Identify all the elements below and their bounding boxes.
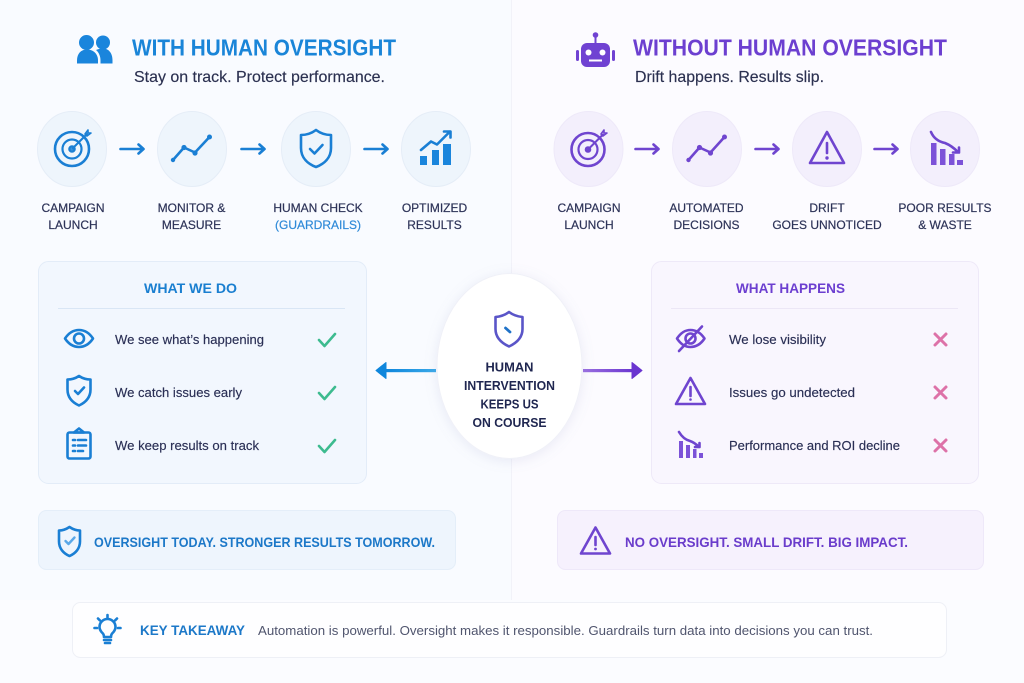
step: human check: HUMAN CHECK — [273, 201, 363, 215]
icon: robot — [576, 32, 615, 67]
panel: what happens — [652, 262, 978, 484]
heading: without human oversight: WITHOUT HUMAN OVERSIGHT — [633, 34, 947, 60]
banner text: OVERSIGHT TODAY. STRONGER RESULTS TOMORROW. — [94, 534, 435, 550]
row: performance decline: Performance and ROI decline — [729, 438, 900, 453]
takeaway text: Automation is powerful. Oversight makes it responsible. Guardrails turn data into decisions you can trust. — [258, 624, 873, 638]
row: lose visibility: We lose visibility — [729, 332, 827, 347]
row: keep results on track — [68, 428, 335, 458]
icon: shield — [496, 312, 522, 346]
row: catch issues early — [68, 376, 335, 406]
step: automated decisions: AUTOMATED — [669, 201, 744, 215]
step: optimized results: RESULTS — [407, 218, 462, 232]
row: performance decline — [679, 432, 946, 458]
arrow — [636, 144, 658, 154]
step: optimized results — [402, 112, 470, 232]
panel: key takeaway — [72, 602, 946, 658]
row: see what's happening — [65, 330, 335, 347]
arrow — [364, 144, 388, 154]
step: campaign launch: LAUNCH — [564, 218, 614, 232]
icon: people — [77, 35, 112, 64]
banner: oversight today — [38, 510, 456, 570]
row: issues go undetected: Issues go undetected — [729, 385, 855, 400]
icon: warning — [581, 528, 610, 554]
row: lose visibility — [677, 326, 946, 351]
step: campaign launch — [554, 112, 623, 232]
banner: no oversight — [558, 510, 984, 570]
callout text: HUMAN — [486, 360, 534, 374]
row: keep results on track: We keep results on track — [115, 438, 259, 453]
label: KEY TAKEAWAY — [140, 622, 246, 638]
subheading: drift happens: Drift happens. Results slip. — [635, 69, 824, 86]
callout text: ON COURSE — [472, 416, 546, 430]
subheading: stay on track: Stay on track. Protect performance. — [134, 69, 385, 86]
step: campaign launch: CAMPAIGN — [557, 201, 621, 215]
step: monitor and measure: MONITOR & — [158, 201, 225, 215]
row: issues go undetected — [676, 378, 946, 404]
step: monitor and measure — [158, 112, 226, 232]
step: poor results: & WASTE — [918, 218, 972, 232]
panel heading: WHAT WE DO — [144, 280, 237, 296]
row: catch issues early: We catch issues early — [115, 385, 242, 400]
arrow — [756, 144, 778, 154]
arrow — [874, 144, 898, 154]
step: poor results: POOR RESULTS — [898, 201, 992, 215]
step: poor results — [898, 112, 992, 232]
step: monitor and measure: MEASURE — [162, 218, 221, 232]
arrow — [120, 144, 144, 154]
step: drift goes unnoticed — [772, 112, 882, 232]
step: campaign launch: CAMPAIGN — [41, 201, 105, 215]
callout text — [464, 360, 555, 430]
step: drift goes unnoticed: DRIFT — [809, 201, 845, 215]
step: human check — [273, 112, 363, 232]
row: see what's happening: We see what’s happening — [115, 332, 264, 347]
step: automated decisions — [669, 112, 744, 232]
banner text: NO OVERSIGHT. SMALL DRIFT. BIG IMPACT. — [625, 534, 908, 550]
step: automated decisions: DECISIONS — [673, 218, 740, 232]
step: optimized results: OPTIMIZED — [402, 201, 467, 215]
step: campaign launch: LAUNCH — [48, 218, 98, 232]
left flow steps — [38, 112, 470, 232]
arrow — [242, 144, 264, 154]
panel heading: WHAT HAPPENS — [736, 280, 845, 296]
callout text: KEEPS US — [480, 398, 538, 412]
step: human check: (GUARDRAILS) — [275, 218, 361, 232]
callout text: INTERVENTION — [464, 379, 555, 393]
step: campaign launch — [38, 112, 106, 232]
heading: with human oversight: WITH HUMAN OVERSIGHT — [132, 34, 396, 60]
step: drift goes unnoticed: GOES UNNOTICED — [772, 218, 882, 232]
icon: light bulb — [94, 615, 120, 643]
panel: what we do — [38, 262, 366, 484]
right flow steps — [554, 112, 992, 232]
arrow: to left — [376, 362, 436, 378]
arrow: to right — [583, 362, 642, 378]
icon: shield — [59, 527, 80, 556]
center callout — [437, 274, 582, 458]
